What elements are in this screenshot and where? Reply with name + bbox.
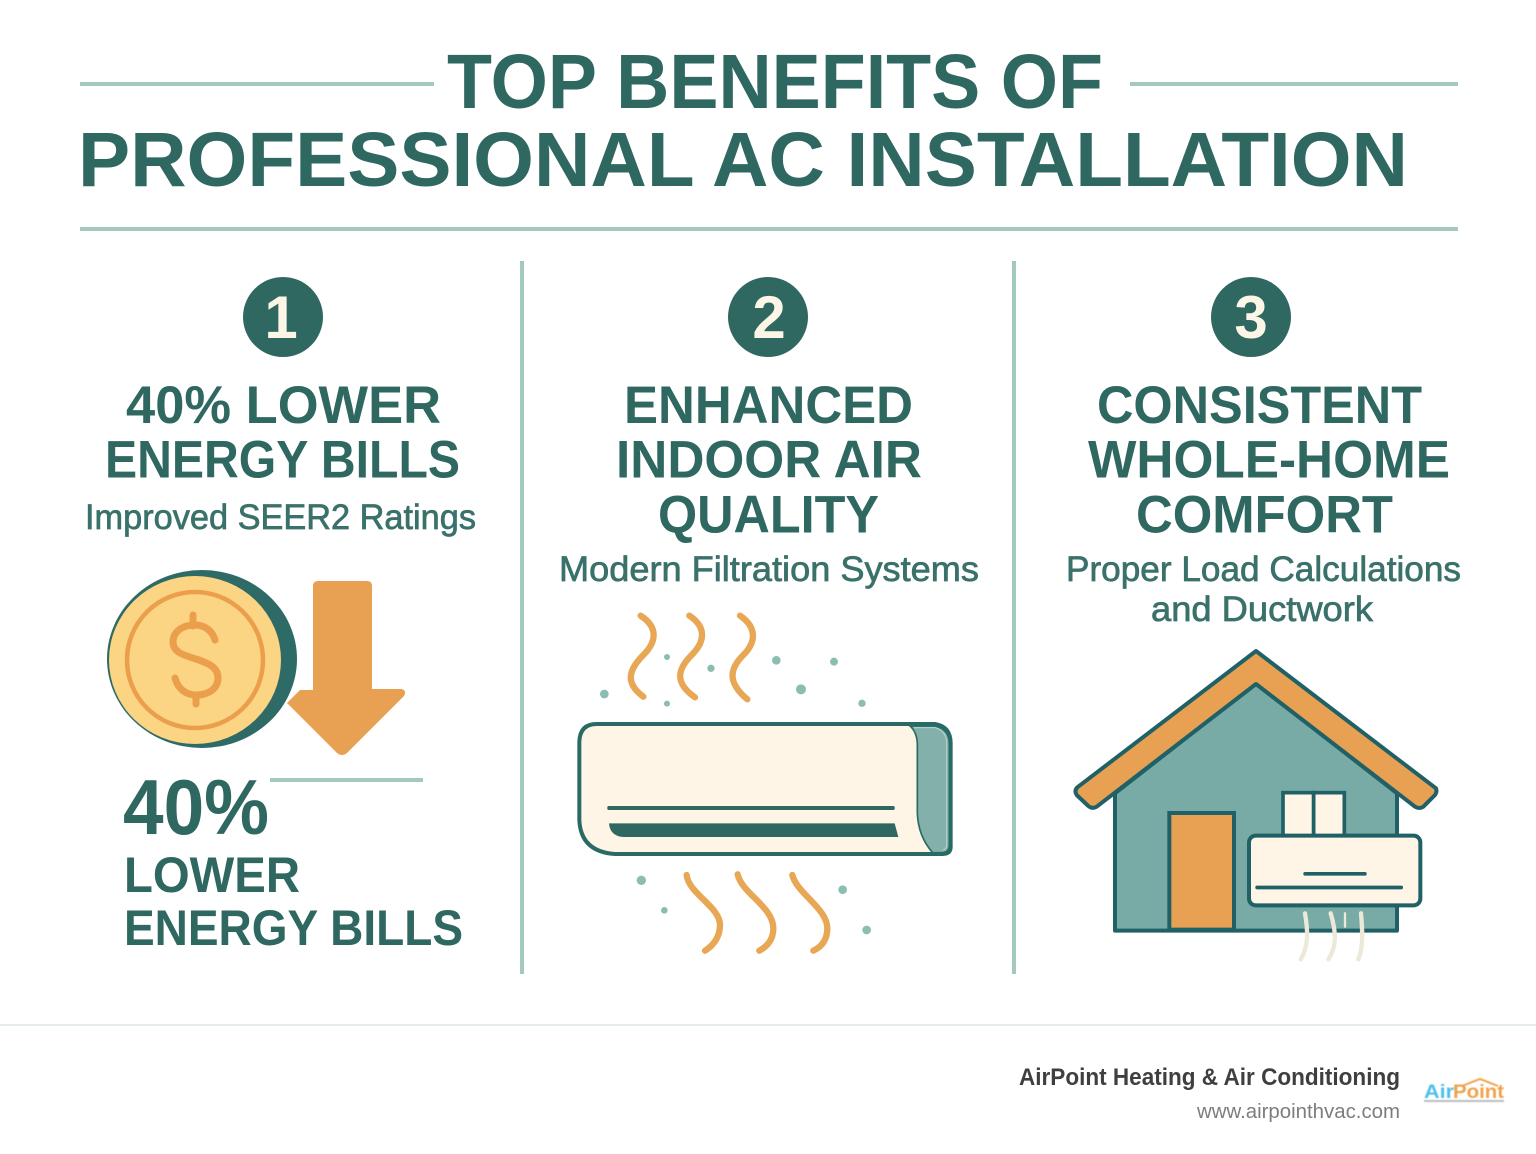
number badge 2 (728, 277, 808, 357)
footer company name: www.airpointhvac.com (1196, 1101, 1400, 1123)
title: TOP BENEFITS OF (447, 39, 1103, 125)
door (1169, 813, 1234, 930)
heading: consistent whole-home comfort: CONSISTENT (1097, 376, 1422, 435)
heading: enhanced indoor air quality: INDOOR AIR (616, 430, 922, 490)
panel: whole-home comfort (1066, 277, 1461, 959)
title (78, 39, 1408, 203)
panel: indoor air quality (559, 277, 979, 951)
logo: AirPoint (1424, 1079, 1505, 1103)
number badge 2: 2 (752, 284, 786, 351)
icon: house with air conditioner (1075, 651, 1436, 959)
subheading: proper load calculations and ductwork: and Ductwork (1151, 590, 1374, 629)
heading: consistent whole-home comfort: WHOLE-HOME (1088, 430, 1450, 490)
heading: enhanced indoor air quality: QUALITY (658, 486, 879, 544)
heading: 40% lower energy bills: 40% LOWER (126, 376, 441, 435)
number badge 1: 1 (264, 284, 298, 351)
icon: down arrow (287, 581, 405, 755)
stat: 40% lower energy bills: LOWER (124, 847, 300, 903)
heading: enhanced indoor air quality (616, 376, 922, 544)
heading: consistent whole-home comfort: COMFORT (1136, 486, 1393, 544)
air conditioner unit (579, 724, 951, 854)
house body (1115, 683, 1397, 931)
stat: 40% lower energy bills (123, 763, 463, 956)
heading: consistent whole-home comfort (1088, 376, 1450, 544)
roof (1075, 651, 1436, 808)
icon: air conditioner with airflow (579, 616, 951, 951)
logo: AirPoint: Air (1424, 1082, 1455, 1103)
heading: enhanced indoor air quality: ENHANCED (624, 376, 913, 435)
subheading: modern filtration systems: Modern Filtration Systems (559, 550, 979, 589)
number badge 1 (243, 277, 323, 357)
footer company name (1019, 1064, 1400, 1123)
heading: 40% lower energy bills (105, 376, 460, 490)
subheading: proper load calculations and ductwork: Proper Load Calculations (1066, 550, 1461, 589)
number badge 3 (1211, 277, 1291, 357)
logo: AirPoint: Point (1453, 1082, 1505, 1103)
wall AC unit (1249, 836, 1420, 905)
number badge 3: 3 (1234, 284, 1268, 351)
stat: 40% lower energy bills: 40% (123, 763, 269, 851)
window (1283, 793, 1344, 836)
airflow waves (631, 616, 827, 951)
subheading: improved SEER2 ratings: Improved SEER2 Ratings (85, 498, 476, 537)
panel: energy bills (85, 277, 476, 956)
particles (600, 654, 871, 934)
heading: 40% lower energy bills: ENERGY BILLS (105, 430, 460, 490)
title: PROFESSIONAL AC INSTALLATION (78, 117, 1408, 203)
footer company name: AirPoint Heating & Air Conditioning (1019, 1064, 1400, 1091)
icon: dollar coin (107, 570, 297, 748)
subheading: proper load calculations and ductwork (1066, 550, 1461, 629)
air streams (1301, 913, 1362, 959)
stat: 40% lower energy bills: ENERGY BILLS (124, 900, 463, 956)
